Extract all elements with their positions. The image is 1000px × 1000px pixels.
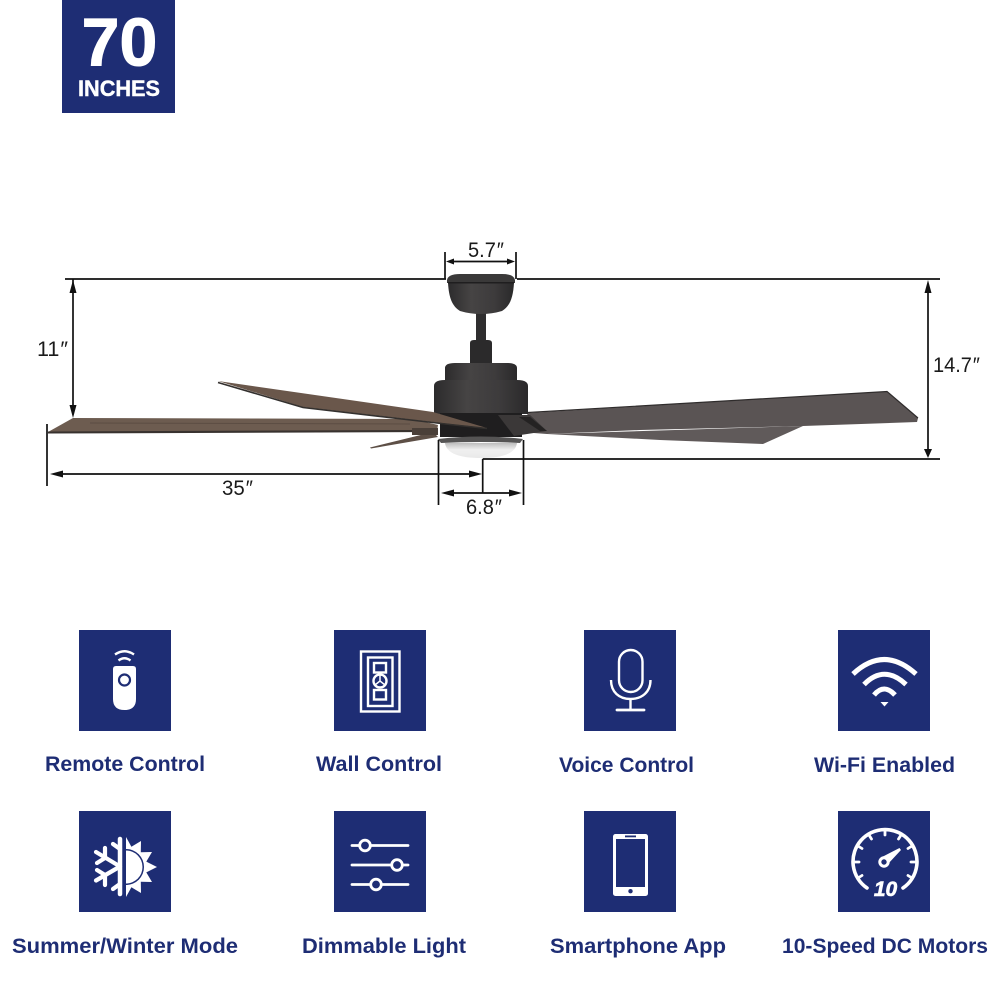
badge: 70 inches: 70 xyxy=(82,4,157,80)
dimension: canopy width 5.7: 5.7″ xyxy=(468,239,504,262)
dimension: canopy width 5.7 xyxy=(445,239,516,279)
icon: snowflake and sun xyxy=(96,837,157,897)
icon: microphone xyxy=(611,650,650,710)
upper wood blade xyxy=(218,381,487,428)
dimension: height 14.7 xyxy=(924,280,980,458)
downrod xyxy=(476,312,486,341)
dimension: height 11 xyxy=(37,279,76,418)
label: wall control: Wall Control xyxy=(316,753,442,776)
dimension: blade length 35 xyxy=(47,424,482,500)
label: smartphone app: Smartphone App xyxy=(550,935,726,958)
feature: smartphone app xyxy=(584,811,676,912)
feature: 10-speed dc motors xyxy=(838,811,930,912)
label: wi-fi enabled: Wi-Fi Enabled xyxy=(814,754,955,777)
icon: wall switch xyxy=(361,652,400,712)
icon: speedometer: 10 xyxy=(874,878,897,901)
dimension: blade length 35: 35″ xyxy=(222,477,254,500)
label: summer/winter mode: Summer/Winter Mode xyxy=(12,935,238,958)
left wood blade xyxy=(48,418,438,435)
right dark blade xyxy=(520,392,918,444)
motor housing xyxy=(434,363,547,437)
feature: wi-fi xyxy=(838,630,930,731)
dimension: top reference line xyxy=(65,278,940,280)
back small wood blade xyxy=(370,432,438,448)
label: dimmable light: Dimmable Light xyxy=(302,935,466,958)
icon: smartphone xyxy=(613,834,648,896)
light kit xyxy=(438,436,523,458)
badge: 70 inches xyxy=(62,0,175,113)
dimension: bottom reference line xyxy=(483,459,940,493)
dimension: light kit width 6.8 xyxy=(438,440,524,519)
icon: remote xyxy=(113,651,136,710)
feature: voice control xyxy=(584,630,676,731)
feature: summer/winter mode xyxy=(79,811,171,912)
label: remote control: Remote Control xyxy=(45,753,205,776)
icon: sliders xyxy=(352,840,408,890)
dimension: height 11: 11″ xyxy=(37,338,69,361)
ceiling fan illustration xyxy=(48,274,918,458)
canopy xyxy=(447,274,515,314)
icon: wi-fi xyxy=(853,660,916,706)
label: 10-speed dc motors: 10-Speed DC Motors xyxy=(782,935,988,958)
dimension: height 14.7: 14.7″ xyxy=(933,354,980,377)
feature: dimmable light xyxy=(334,811,426,912)
dimension: light kit width 6.8: 6.8″ xyxy=(466,496,502,519)
label: voice control: Voice Control xyxy=(559,754,694,777)
badge: 70 inches: INCHES xyxy=(78,76,160,101)
feature: wall control xyxy=(334,630,426,731)
coupler xyxy=(470,340,492,363)
feature: remote control xyxy=(79,630,171,731)
